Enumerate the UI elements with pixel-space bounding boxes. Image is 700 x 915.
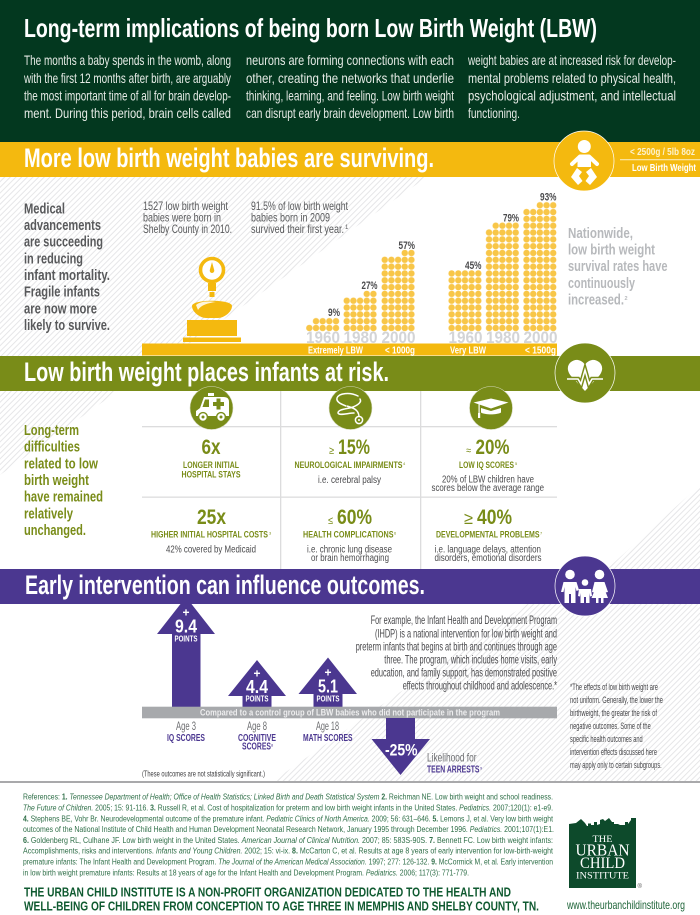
- stat: developmental problems: ≥: [464, 509, 473, 528]
- text: references: References: 1. Tennessee Department of Health; Office of Health Statistics; Linked Birth and Death Statistical System 2. Reichman NE. Low birth weight and school readiness.: [23, 792, 553, 802]
- chart axis: year labels: 1960: [306, 328, 340, 347]
- logo: The Urban Child Institute: THE: [592, 834, 613, 844]
- text: medical advancements: Fragile infants: [24, 284, 100, 300]
- text: references: [23, 792, 554, 877]
- text: IHDP description: three. The program, which includes home visits, early: [384, 652, 557, 666]
- stat: neurological impairments: ≥: [329, 445, 334, 457]
- chart axis: year labels: 1960: [448, 328, 482, 347]
- text: long-term difficulties: [24, 423, 103, 539]
- chart: very LBW survival: [448, 192, 557, 331]
- chart axis: year labels: 2000: [524, 328, 558, 347]
- stat: neurological impairments: i.e. cerebral palsy: [318, 475, 381, 486]
- stat: neurological impairments: NEUROLOGICAL IMPAIRMENTS: [294, 460, 402, 471]
- text: Shelby County births: Shelby County in 2010.: [143, 222, 232, 236]
- text: IHDP description: For example, the Infant Health and Development Program: [371, 613, 557, 627]
- value labels: 9%: [328, 307, 340, 319]
- label: teen arrests: 9: [480, 766, 483, 770]
- label: cognitive scores: Age 8: [247, 719, 267, 733]
- panel: header: [0, 0, 700, 142]
- label: cognitive scores: 8: [271, 742, 274, 748]
- stat: higher hospital costs: 25x: [197, 506, 226, 529]
- text: references: outcomes of the National Institute of Child Health and Human Development Neonatal Research Network, January 1995 through December 1996. Pediatrics. 2001;107(1):E1.: [23, 824, 554, 834]
- stat: low IQ scores: [432, 436, 544, 494]
- intro text: column 2: other, creating the networks that underlie: [246, 70, 454, 86]
- text: medical advancements: infant mortality.: [24, 268, 110, 284]
- chart base bar with weight categories: < 1000g: [385, 344, 415, 356]
- text: IHDP description: education, and family support, has demonstrated positive: [371, 665, 557, 679]
- text: first-year survival: 1: [345, 225, 349, 231]
- stat: longer hospital stays: 6x: [202, 436, 221, 459]
- stat: low IQ scores: LOW IQ SCORES: [459, 460, 514, 471]
- arrow: IQ scores: [157, 597, 215, 707]
- text: IHDP description: preterm infants that begins at birth and continues through age: [356, 639, 557, 653]
- heading: survival: More low birth weight babies are surviving.: [24, 143, 434, 173]
- bar: very LBW 1980: [486, 222, 519, 331]
- text: footnote on subgroups: specific health outcomes and: [570, 734, 643, 744]
- text: long-term difficulties: related to low: [24, 456, 99, 472]
- stat: higher hospital costs: [151, 506, 272, 556]
- arrow: cognitive scores: 4.4: [246, 677, 268, 697]
- intro text: column 1: [23, 52, 231, 121]
- intro text: column 3: functioning.: [468, 105, 520, 121]
- label: weight threshold: [620, 146, 700, 174]
- text: medical advancements: Medical: [24, 202, 65, 218]
- stat: low IQ scores: scores below the average range: [432, 483, 544, 494]
- chart base bar with weight categories: [142, 344, 557, 356]
- stat: health complications: 60%: [337, 506, 372, 529]
- text: references: Accomplishments, risks and interventions. Infants and Young Children. 2002; 15: vi-ix. 8. McCarton C, et al. Results at age 8 years of early intervention for low-birth-weight: [23, 846, 553, 856]
- label: IQ scores: IQ SCORES: [167, 733, 205, 744]
- arrow: math scores: POINTS: [316, 694, 340, 704]
- stat: higher hospital costs: 3: [269, 530, 272, 536]
- intro text: column 1: The months a baby spends in the womb, along: [24, 52, 231, 68]
- panel: risk band: [0, 343, 700, 403]
- stat: higher hospital costs: 42% covered by Medicaid: [166, 544, 256, 556]
- text: nationwide survival: 2: [624, 296, 628, 302]
- icon: stethoscope: [329, 386, 372, 430]
- label: math scores: MATH SCORES: [303, 733, 353, 744]
- stat: developmental problems: disorders, emotional disorders: [434, 553, 542, 564]
- text: IHDP description: effects throughout childhood and adolescence.*: [403, 678, 557, 692]
- stat: low IQ scores: 20%: [476, 436, 510, 459]
- stat: neurological impairments: 15%: [338, 436, 370, 459]
- intro text: column 1: with the first 12 months after birth, are arguably: [23, 70, 231, 86]
- value labels: [328, 240, 415, 319]
- text: long-term difficulties: birth weight: [24, 473, 89, 489]
- logo: The Urban Child Institute: [569, 818, 642, 890]
- text: organization mission: THE URBAN CHILD INSTITUTE IS A NON-PROFIT ORGANIZATION DEDICATED TO THE HEALTH AND: [24, 886, 511, 900]
- stat: low IQ scores: ≈: [466, 445, 471, 457]
- stat: health complications: HEALTH COMPLICATIONS: [303, 530, 394, 540]
- stat: health complications: 6: [394, 530, 397, 536]
- text: organization mission: WELL-BEING OF CHILDREN FROM CONCEPTION TO AGE THREE IN MEMPHIS AND SHELBY COUNTY, TN.: [24, 900, 539, 914]
- label: IQ scores: [167, 719, 205, 744]
- text: IHDP description: (IHDP) is a national intervention for low birth weight and: [375, 626, 557, 640]
- panel: intervention band: [0, 556, 700, 616]
- intro text: column 2: [246, 52, 454, 121]
- stat: health complications: or brain hemorrhaging: [311, 553, 389, 564]
- text: nationwide survival: increased.: [568, 292, 624, 308]
- comparison bar: Compared to a control group of LBW babies who did not participate in the program: [200, 708, 500, 718]
- value labels: 27%: [362, 280, 378, 292]
- heading: intervention: Early intervention can influence outcomes.: [25, 570, 425, 600]
- stat: developmental problems: 7: [540, 530, 543, 536]
- value labels: 57%: [398, 240, 415, 252]
- stat: higher hospital costs: HIGHER INITIAL HOSPITAL COSTS: [151, 530, 268, 540]
- text: Shelby County births: 1527 low birth weight: [143, 199, 229, 213]
- label: teen arrests: [427, 750, 483, 776]
- stat: developmental problems: i.e. language delays, attention: [434, 544, 541, 556]
- text: references: in low birth weight premature infants: Results at 18 years of age for the Infant Health and Development Program. Pediatrics. 2006; 117(3): 771-779.: [23, 867, 469, 877]
- arrow: teen arrests: [372, 718, 430, 775]
- value labels: 45%: [465, 260, 482, 272]
- stat: developmental problems: [434, 506, 543, 564]
- text: Shelby County births: [143, 199, 232, 236]
- arrow: IQ scores: POINTS: [174, 634, 198, 644]
- chart axis: year labels: 1980: [344, 328, 378, 347]
- bar: very LBW 1960: [448, 270, 482, 331]
- logo: The Urban Child Institute: URBAN: [576, 840, 630, 860]
- arrow: math scores: +: [324, 666, 332, 680]
- label: cognitive scores: [238, 719, 276, 752]
- arrow: IQ scores: 9.4: [175, 616, 197, 636]
- text: references: 4. Stephens BE, Vohr Br. Neurodevelopmental outcome of the premature infant. Pediatric Clinics of North America. 2009; 56: 631–646. 5. Lemons J, et al. Very low birth weight: [23, 813, 553, 823]
- logo: The Urban Child Institute: INSTITUTE: [576, 872, 629, 882]
- intro text: column 3: [467, 52, 676, 121]
- text: medical advancements: likely to survive.: [24, 318, 110, 334]
- label: IQ scores: Age 3: [176, 719, 196, 733]
- chart: extremely LBW survival: [306, 240, 415, 331]
- bar: extremely LBW 1960: [306, 318, 339, 331]
- text: nationwide survival: low birth weight: [568, 242, 655, 258]
- text: medical advancements: [24, 202, 110, 334]
- icon: heart with pulse: [555, 343, 615, 403]
- icon: infant scale: [183, 258, 241, 342]
- text: long-term difficulties: unchanged.: [24, 523, 86, 539]
- stat: health complications: ≤: [328, 515, 333, 527]
- heading: risk: Low birth weight places infants at risk.: [24, 357, 389, 387]
- text: footnote on subgroups: negative outcomes. Some of the: [570, 721, 651, 731]
- intro text: column 2: can disrupt early brain development. Low birth: [246, 105, 454, 121]
- icon: baby: [554, 131, 614, 191]
- text: Shelby County births: babies were born in: [143, 210, 221, 224]
- text: long-term difficulties: Long-term: [24, 423, 79, 439]
- stat: low IQ scores: 5: [515, 461, 518, 466]
- text: medical advancements: are succeeding: [24, 234, 103, 250]
- stat: neurological impairments: 4: [403, 461, 406, 466]
- bar: extremely LBW 1980: [343, 290, 377, 331]
- chart base bar with weight categories: Very LBW: [450, 344, 486, 356]
- text: medical advancements: in reducing: [24, 252, 83, 268]
- text: IHDP description: [356, 613, 557, 692]
- text: nationwide survival: survival rates have: [568, 259, 668, 275]
- text: references: The Future of Children. 2005; 15: 91-116. 3. Russell R, et al. Cost of hospitalization for preterm and low birth weight infants in the United States. Pediatrics. 2007;120(1): e1-e9.: [23, 802, 553, 812]
- label: teen arrests: Likelihood for: [427, 750, 476, 764]
- text: medical advancements: advancements: [24, 218, 101, 234]
- icon: ambulance: [190, 386, 233, 430]
- stat: health complications: [303, 506, 397, 564]
- text: organization mission: [24, 886, 539, 914]
- intro text: column 1: the most important time of all for brain develop-: [24, 88, 231, 104]
- stat: neurological impairments: [294, 436, 406, 486]
- arrow: math scores: [298, 658, 357, 707]
- value labels: [465, 192, 557, 272]
- chart base bar with weight categories: Extremely LBW: [308, 344, 363, 356]
- chart axis: year labels: 1980: [486, 328, 520, 347]
- logo: The Urban Child Institute: CHILD: [580, 855, 625, 872]
- logo: The Urban Child Institute: ®: [638, 883, 642, 890]
- text: medical advancements: are now more: [24, 302, 97, 318]
- text: first-year survival: [251, 199, 349, 236]
- value labels: 93%: [540, 192, 557, 204]
- stat: longer hospital stays: HOSPITAL STAYS: [182, 470, 240, 480]
- arrow: cognitive scores: [228, 660, 286, 707]
- text: nationwide survival: [568, 226, 668, 308]
- label: math scores: [303, 719, 353, 744]
- intro text: column 2: thinking, learning, and feeling. Low birth weight: [246, 88, 454, 104]
- text: long-term difficulties: difficulties: [24, 440, 80, 456]
- text: references: 6. Goldenberg RL, Culhane JF. Low birth weight in the United States. American Journal of Clinical Nutrition. 2007; 85: 583S-90S. 7. Bennett FC. Low birth weight infants:: [23, 835, 553, 845]
- stat: longer hospital stays: [182, 436, 240, 480]
- panel: survival band: [0, 131, 700, 191]
- arrow: IQ scores: +: [182, 606, 190, 620]
- arrow: cognitive scores: POINTS: [246, 694, 269, 704]
- text: footnote on subgroups: [570, 682, 663, 770]
- stat: health complications: i.e. chronic lung disease: [307, 544, 392, 556]
- stat: longer hospital stays: LONGER INITIAL: [183, 460, 239, 471]
- chart axis: year labels: [306, 328, 558, 347]
- label: teen arrests: TEEN ARRESTS: [427, 764, 480, 776]
- intro text: column 1: ment. During this period, brain cells called: [24, 105, 231, 121]
- chart axis: year labels: 2000: [382, 328, 416, 347]
- text: long-term difficulties: relatively: [24, 506, 73, 522]
- text: footnote on subgroups: birthweight, the greater the risk of: [570, 708, 657, 718]
- label: cognitive scores: SCORES: [242, 742, 271, 752]
- icon: graduation cap: [470, 386, 512, 430]
- bar: very LBW 2000: [523, 202, 557, 331]
- arrow: math scores: 5.1: [318, 676, 338, 696]
- stat: low IQ scores: 20% of LBW children have: [442, 474, 534, 486]
- text: long-term difficulties: have remained: [24, 490, 103, 506]
- label: math scores: Age 18: [316, 719, 339, 733]
- intro text: column 2: neurons are forming connections with each: [246, 52, 454, 68]
- label: cognitive scores: COGNITIVE: [238, 733, 276, 744]
- note: not statistically significant: (These outcomes are not statistically significant.): [142, 768, 265, 778]
- value labels: 79%: [503, 212, 519, 224]
- chart base bar with weight categories: < 1500g: [525, 344, 556, 356]
- text: first-year survival: babies born in 2009: [251, 210, 330, 224]
- stat: developmental problems: DEVELOPMENTAL PROBLEMS: [436, 530, 540, 540]
- stat: developmental problems: 40%: [477, 506, 512, 529]
- text: nationwide survival: Nationwide,: [568, 226, 633, 242]
- arrow: cognitive scores: +: [253, 666, 261, 680]
- text: nationwide survival: continuously: [568, 276, 635, 292]
- icon: family: [555, 556, 615, 616]
- text: first-year survival: survived their first year.: [251, 222, 344, 236]
- bar: extremely LBW 2000: [381, 250, 415, 331]
- arrow: teen arrests: -25%: [385, 740, 418, 760]
- text: first-year survival: 91.5% of low birth weight: [251, 199, 348, 213]
- text: references: premature infants: The Infant Health and Development Program. The Journal of the American Medical Association. 1997; 277: 126-132. 9. McCormick M, et al. Early intervention: [23, 856, 553, 866]
